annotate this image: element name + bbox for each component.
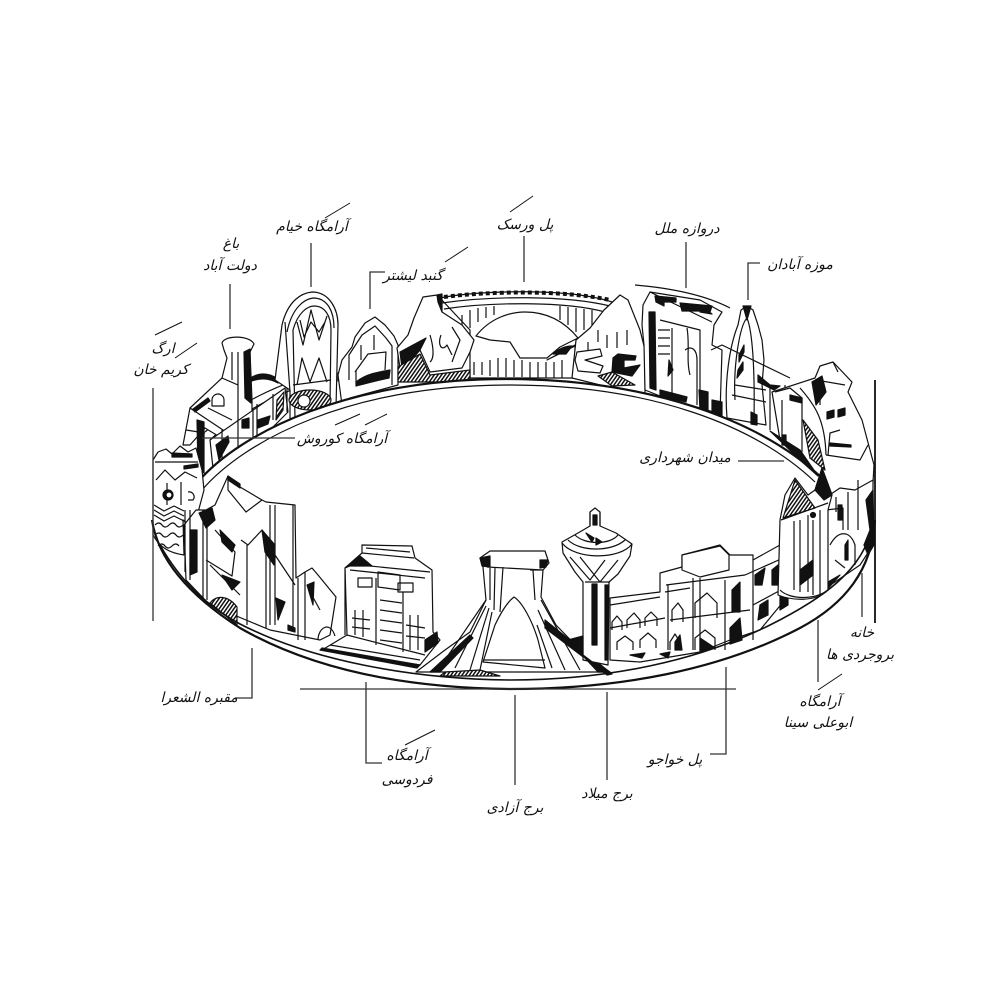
label: Khaju Bridge: پل خواجو — [646, 752, 702, 768]
leader: Municipality Square — [738, 460, 784, 462]
building: house on the right — [772, 362, 874, 500]
label: Abadan Museum: موزه آبادان — [767, 255, 833, 273]
label: Veresk bridge: پل ورسک — [497, 217, 553, 233]
label: Gate of All Nations: دروازه ملل — [655, 221, 720, 237]
ring with landmark buildings — [152, 285, 875, 689]
label: Arg of Karim Khan: کریم خان — [133, 362, 192, 378]
leader lines — [153, 236, 875, 785]
building: Khaju bridge — [610, 545, 793, 662]
label: Tomb of Ferdowsi: آرامگاه — [386, 746, 432, 764]
leader: Karim Khan — [152, 388, 154, 621]
building: Abadan museum — [711, 306, 790, 440]
rim: front edge of ring — [152, 520, 875, 689]
building: rock and stylised letters — [572, 295, 645, 396]
leader: Veresk bridge — [523, 236, 525, 282]
label: Dolat Abad Garden: باغ — [223, 236, 239, 252]
leader: Gate of Nations — [685, 242, 687, 288]
leader: Lishtar dome — [370, 272, 385, 309]
leader: Abadan museum — [748, 263, 760, 300]
label: Borujerdi House — [826, 625, 894, 663]
label: Tomb of Avicenna — [784, 674, 854, 731]
building: Veresk bridge — [440, 292, 612, 378]
label: Tomb of Ferdowsi: فردوسی — [382, 772, 433, 788]
label: Dolat Abad Garden: دولت آباد — [203, 256, 258, 274]
leader: Milad — [606, 692, 608, 780]
label: Veresk bridge — [497, 196, 553, 233]
leader: Khaju — [710, 667, 726, 754]
building: Gate of All Nations — [635, 285, 730, 416]
label: Tomb of Avicenna: ابوعلی سینا — [784, 715, 854, 731]
label: Tomb of Cyrus: آرامگاه کوروش — [297, 429, 391, 447]
label: Borujerdi House: خانه — [850, 625, 875, 641]
building: Tomb of Avicenna — [778, 468, 832, 599]
back wall arc — [204, 385, 290, 440]
leader: Khayyam — [310, 243, 312, 287]
label: Lishtar dome: گنبد لیشتر — [381, 267, 446, 284]
leader: Poets tomb — [235, 648, 252, 698]
back half of the ring buildings — [183, 285, 874, 500]
label: Tomb of Avicenna: آرامگاه — [799, 692, 845, 710]
building: Arg of Karim Khan — [153, 446, 204, 555]
building: Azadi Tower — [416, 551, 612, 676]
label: Milad Tower: برج میلاد — [581, 786, 633, 802]
label: Arg of Karim Khan — [133, 322, 197, 378]
building: Milad Tower — [562, 508, 632, 672]
leader: Avicenna — [817, 620, 819, 682]
label: Tomb of Cyrus — [297, 414, 391, 447]
building: Borujerdi House — [822, 480, 874, 592]
leader: Borujerdi short — [861, 573, 863, 617]
building: Tomb of Ferdowsi — [320, 545, 440, 668]
building: Tomb of poets — [184, 476, 336, 640]
building: rock left of bridge — [397, 294, 474, 382]
label: Arg of Karim Khan: ارگ — [151, 340, 177, 357]
rim: back edge of ring — [197, 379, 822, 490]
label: Dolat Abad Garden — [203, 236, 258, 274]
leader: Dolat Abad — [229, 284, 231, 329]
leader: Borujerdi long — [874, 380, 876, 623]
building: Lishtar dome — [338, 317, 398, 405]
label: Azadi Tower: برج آزادی — [487, 798, 544, 816]
building: Tomb of Khayyam — [274, 291, 339, 419]
baseline — [300, 688, 736, 690]
label: Borujerdi House: بروجردی ها — [826, 647, 894, 663]
building: Dolat Abad garden tower — [183, 337, 278, 473]
label: Tomb of Khayyam — [276, 203, 352, 235]
leader: Tomb of Cyrus — [202, 437, 295, 439]
label: Lishtar dome — [381, 247, 468, 284]
back wall panels — [210, 388, 288, 478]
label: Municipality Square: میدان شهرداری — [639, 450, 731, 466]
label: Poets' Tomb: مقبره الشعرا — [160, 690, 238, 706]
leader: Ferdowsi — [366, 682, 382, 763]
label: Tomb of Khayyam: آرامگاه خیام — [276, 217, 352, 235]
label: Tomb of Ferdowsi — [382, 730, 435, 788]
leader: Azadi — [514, 695, 516, 785]
